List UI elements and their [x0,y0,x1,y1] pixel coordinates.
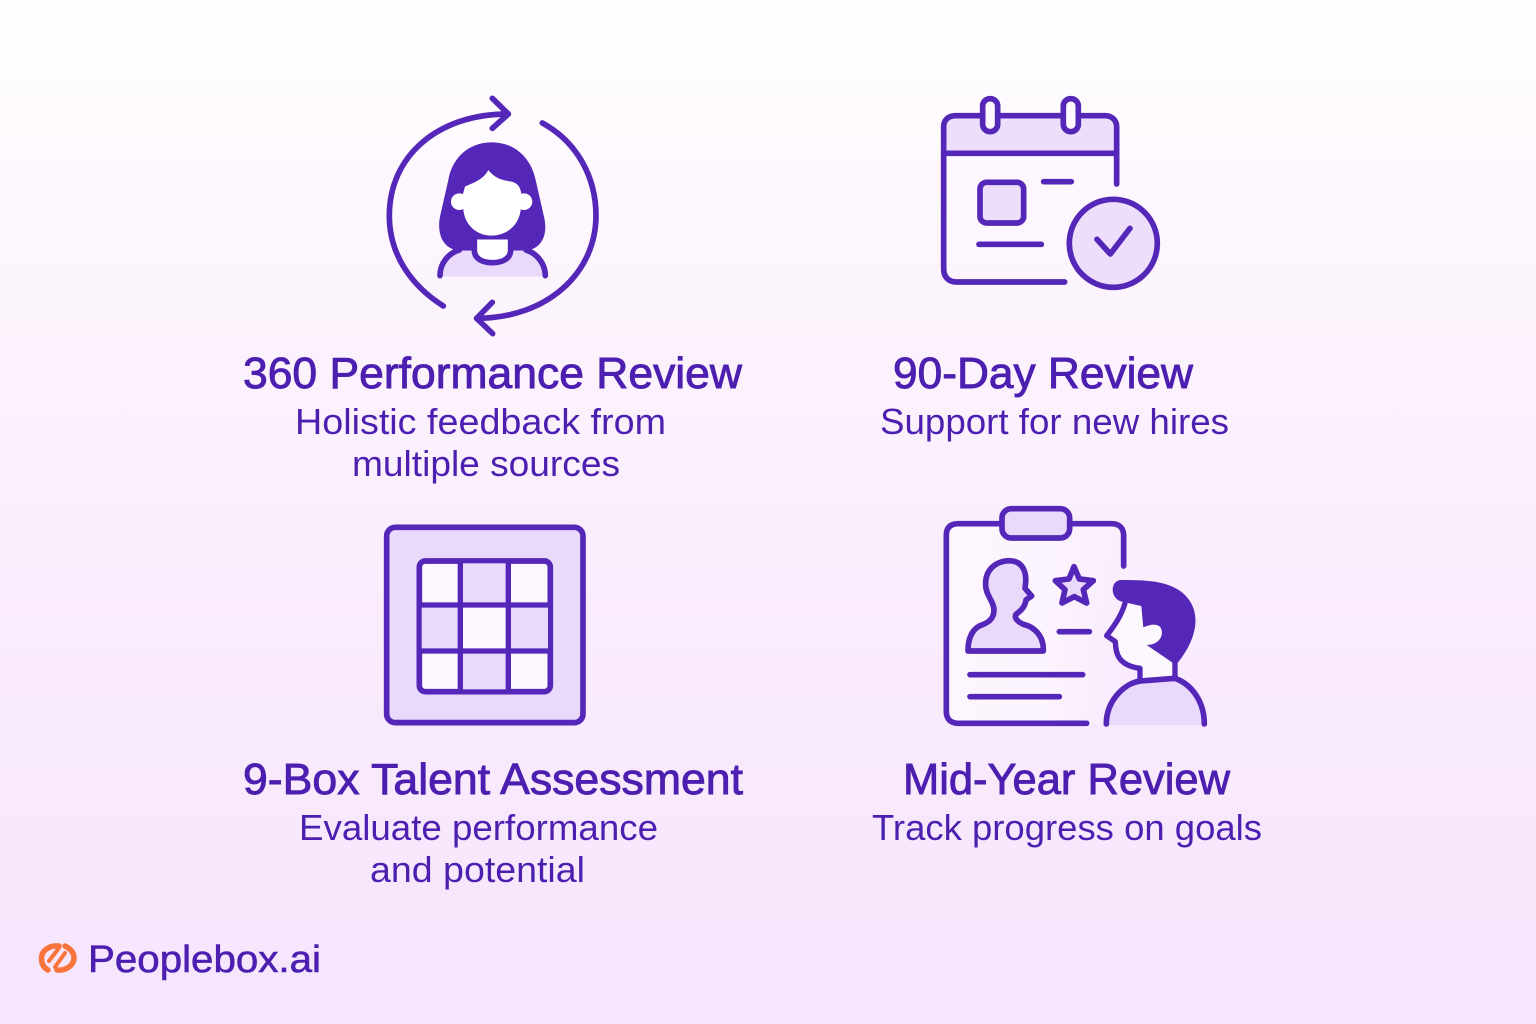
text: 90-Day description: Support for new hires [880,401,1229,442]
text: 9-Box description: and potential [370,849,585,890]
logo: Peoplebox.ai [42,939,321,981]
heading: 90-Day Review: 90-Day Review [893,349,1193,398]
panel: Mid-Year Review [872,509,1262,848]
icon: calendar with check [944,99,1157,287]
icon: nine box grid [387,527,583,723]
heading: 360 Performance Review: 360 Performance Review [243,349,742,398]
text: 9-Box description: Evaluate performance [299,807,658,848]
icon: orange link logo [42,946,74,970]
icon: clipboard profile with reviewer [946,509,1204,725]
text: 360 description: Holistic feedback from [295,401,666,442]
text: 360 description [295,401,666,484]
text: 360 description: multiple sources [352,443,620,484]
text: 9-Box description [299,807,658,890]
wordmark: Peoplebox.ai [88,939,321,981]
icon: person with circular arrows [389,98,596,334]
heading: Mid-Year Review: Mid-Year Review [903,755,1230,804]
text: Mid-Year description: Track progress on goals [872,807,1262,848]
panel: 360 Performance Review [243,98,742,484]
panel: 90-Day Review [880,99,1229,442]
panel: 9-Box Talent Assessment [243,527,743,890]
heading: 9-Box Talent Assessment: 9-Box Talent Assessment [243,755,743,804]
